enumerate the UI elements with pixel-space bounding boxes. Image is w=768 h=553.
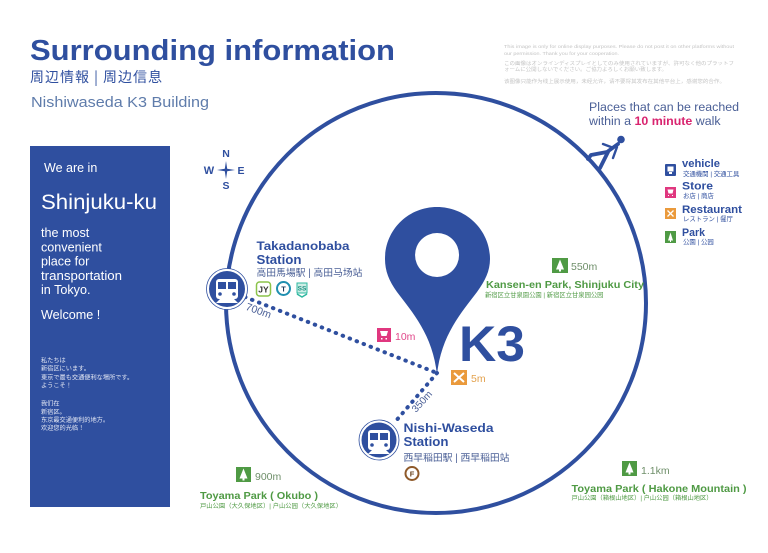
title: Surrounding information [30, 35, 395, 67]
usage notice: 该图像只能作为线上展示使用，未经允许，请不要将其发布在其他平台上，感谢您的合作。 [504, 78, 725, 85]
map pin K3 [385, 207, 490, 375]
park: Toyama Hakone: 1.1km [641, 465, 670, 477]
park icon [622, 461, 637, 476]
distance 350m: 350m [410, 389, 435, 415]
panel: intro: the most [41, 226, 90, 240]
dotted route to Nishi-Waseda [395, 373, 437, 422]
park: Kansen-en [485, 258, 644, 299]
line icon SS: SS [298, 286, 307, 292]
walking range circle [226, 93, 646, 513]
compass: S [222, 180, 230, 192]
compass: W [204, 165, 215, 177]
compass [204, 148, 245, 192]
park: Toyama Okubo: Toyama Park ( Okubo ) [200, 491, 318, 502]
park: Toyama Okubo: 戸山公園（大久保地区）| 户山公园（大久保地区） [200, 502, 342, 510]
restaurant marker 5m [451, 370, 486, 385]
station label: Nishi-Waseda: 西早稲田駅 | 西早稲田站 [404, 451, 510, 464]
legend: store: お店 | 商店 [683, 191, 714, 200]
panel: intro: 私たちは [41, 356, 66, 364]
compass: E [237, 165, 245, 177]
dotted route to Takadanobaba [245, 297, 437, 373]
usage notice [504, 44, 735, 85]
line icon JY: JY [258, 284, 269, 294]
station label: Takadanobaba: 高田馬場駅 | 高田马场站 [256, 266, 363, 279]
park: Toyama Okubo: 900m [255, 471, 282, 483]
park: Toyama Hakone: 戸山公園（箱根山地区）| 户山公园（箱根山地区） [572, 494, 712, 502]
park: Toyama Hakone [572, 461, 746, 502]
legend: vehicle: 交通機関 | 交通工具 [683, 169, 740, 178]
panel: intro: 新宿区。 [41, 408, 66, 416]
usage notice: This image is only for online display purposes. Please do not post it on other platforms without [504, 44, 735, 50]
station label: Takadanobaba [256, 239, 363, 297]
usage notice: our permission. Thank you for your cooperation. [504, 51, 619, 57]
legend: restaurant: レストラン | 餐厅 [683, 214, 734, 223]
subtitle chinese: 周辺情報 | 周边信息 [30, 67, 162, 87]
station label: Takadanobaba: Takadanobaba [256, 239, 350, 253]
park: Kansen-en: 550m [571, 261, 598, 273]
legend: park [665, 227, 714, 246]
restaurant marker 5m: 5m [471, 373, 486, 385]
store marker 10m: 10m [395, 331, 416, 343]
panel: intro: 我们在 [41, 400, 60, 408]
panel: intro [30, 146, 170, 507]
park: Kansen-en: Kansen-en Park, Shinjuku City [486, 280, 644, 291]
panel: intro: 东京最交通便利的地方。 [41, 416, 109, 424]
walk range caption: within a 10 minute walk [588, 114, 721, 128]
usage notice: ォームに公開しないでください。ご協力よろしくお願い致します。 [504, 66, 667, 73]
station label: Nishi-Waseda [404, 421, 510, 480]
panel: intro: 欢迎您的光临！ [41, 424, 84, 432]
park icon [236, 467, 251, 482]
line icon F: F [410, 470, 415, 478]
distance 700m: 700m [244, 301, 273, 321]
panel: intro: place for [41, 254, 89, 268]
station label: Takadanobaba: Station [256, 253, 302, 267]
panel: intro: 東京で最も交通便利な場所です。 [41, 374, 133, 382]
line icon T: T [281, 284, 286, 294]
panel: intro: convenient [41, 240, 102, 254]
panel: intro: in Tokyo. [41, 283, 90, 297]
panel: intro: Shinjuku-ku [41, 191, 157, 214]
panel: intro: ようこそ！ [41, 382, 72, 390]
panel: intro: 新宿区にいます。 [41, 364, 90, 372]
legend: restaurant: Restaurant [682, 204, 742, 216]
building name: Nishiwaseda K3 Building [31, 95, 209, 111]
park icon [552, 258, 568, 273]
store marker 10m [377, 328, 416, 343]
legend: park: 公園 | 公园 [683, 238, 714, 246]
walk range caption: Places that can be reached [589, 100, 739, 114]
legend: store [665, 180, 714, 200]
park: Kansen-en: 新宿区立甘泉園公園 | 新宿区立甘泉园公园 [485, 290, 603, 299]
walk range caption [588, 100, 739, 128]
station label: Nishi-Waseda: Nishi-Waseda [404, 421, 494, 435]
legend: vehicle: vehicle [682, 158, 720, 170]
legend: restaurant [665, 204, 742, 223]
park: Toyama Hakone: Toyama Park ( Hakone Mountain ) [572, 484, 746, 495]
panel: intro: We are in [44, 161, 97, 175]
station: Nishi-Waseda icon [359, 420, 399, 460]
legend: park: Park [682, 227, 706, 239]
panel: intro: Welcome ! [41, 308, 100, 322]
park: Toyama Okubo [200, 467, 342, 510]
station label: Nishi-Waseda: Station [404, 435, 448, 449]
legend: vehicle [665, 158, 740, 178]
legend: store: Store [682, 180, 713, 192]
K3 label: K3 [459, 316, 525, 372]
icon: walking person [588, 136, 625, 168]
legend [665, 158, 742, 246]
compass: N [222, 148, 230, 160]
station: Takadanobaba icon [206, 268, 248, 310]
usage notice: この画像はオンラインディスプレイとしてのみ使用されていますが、許可なく他のプラットフ [504, 60, 734, 67]
panel: intro: transportation [41, 269, 122, 283]
